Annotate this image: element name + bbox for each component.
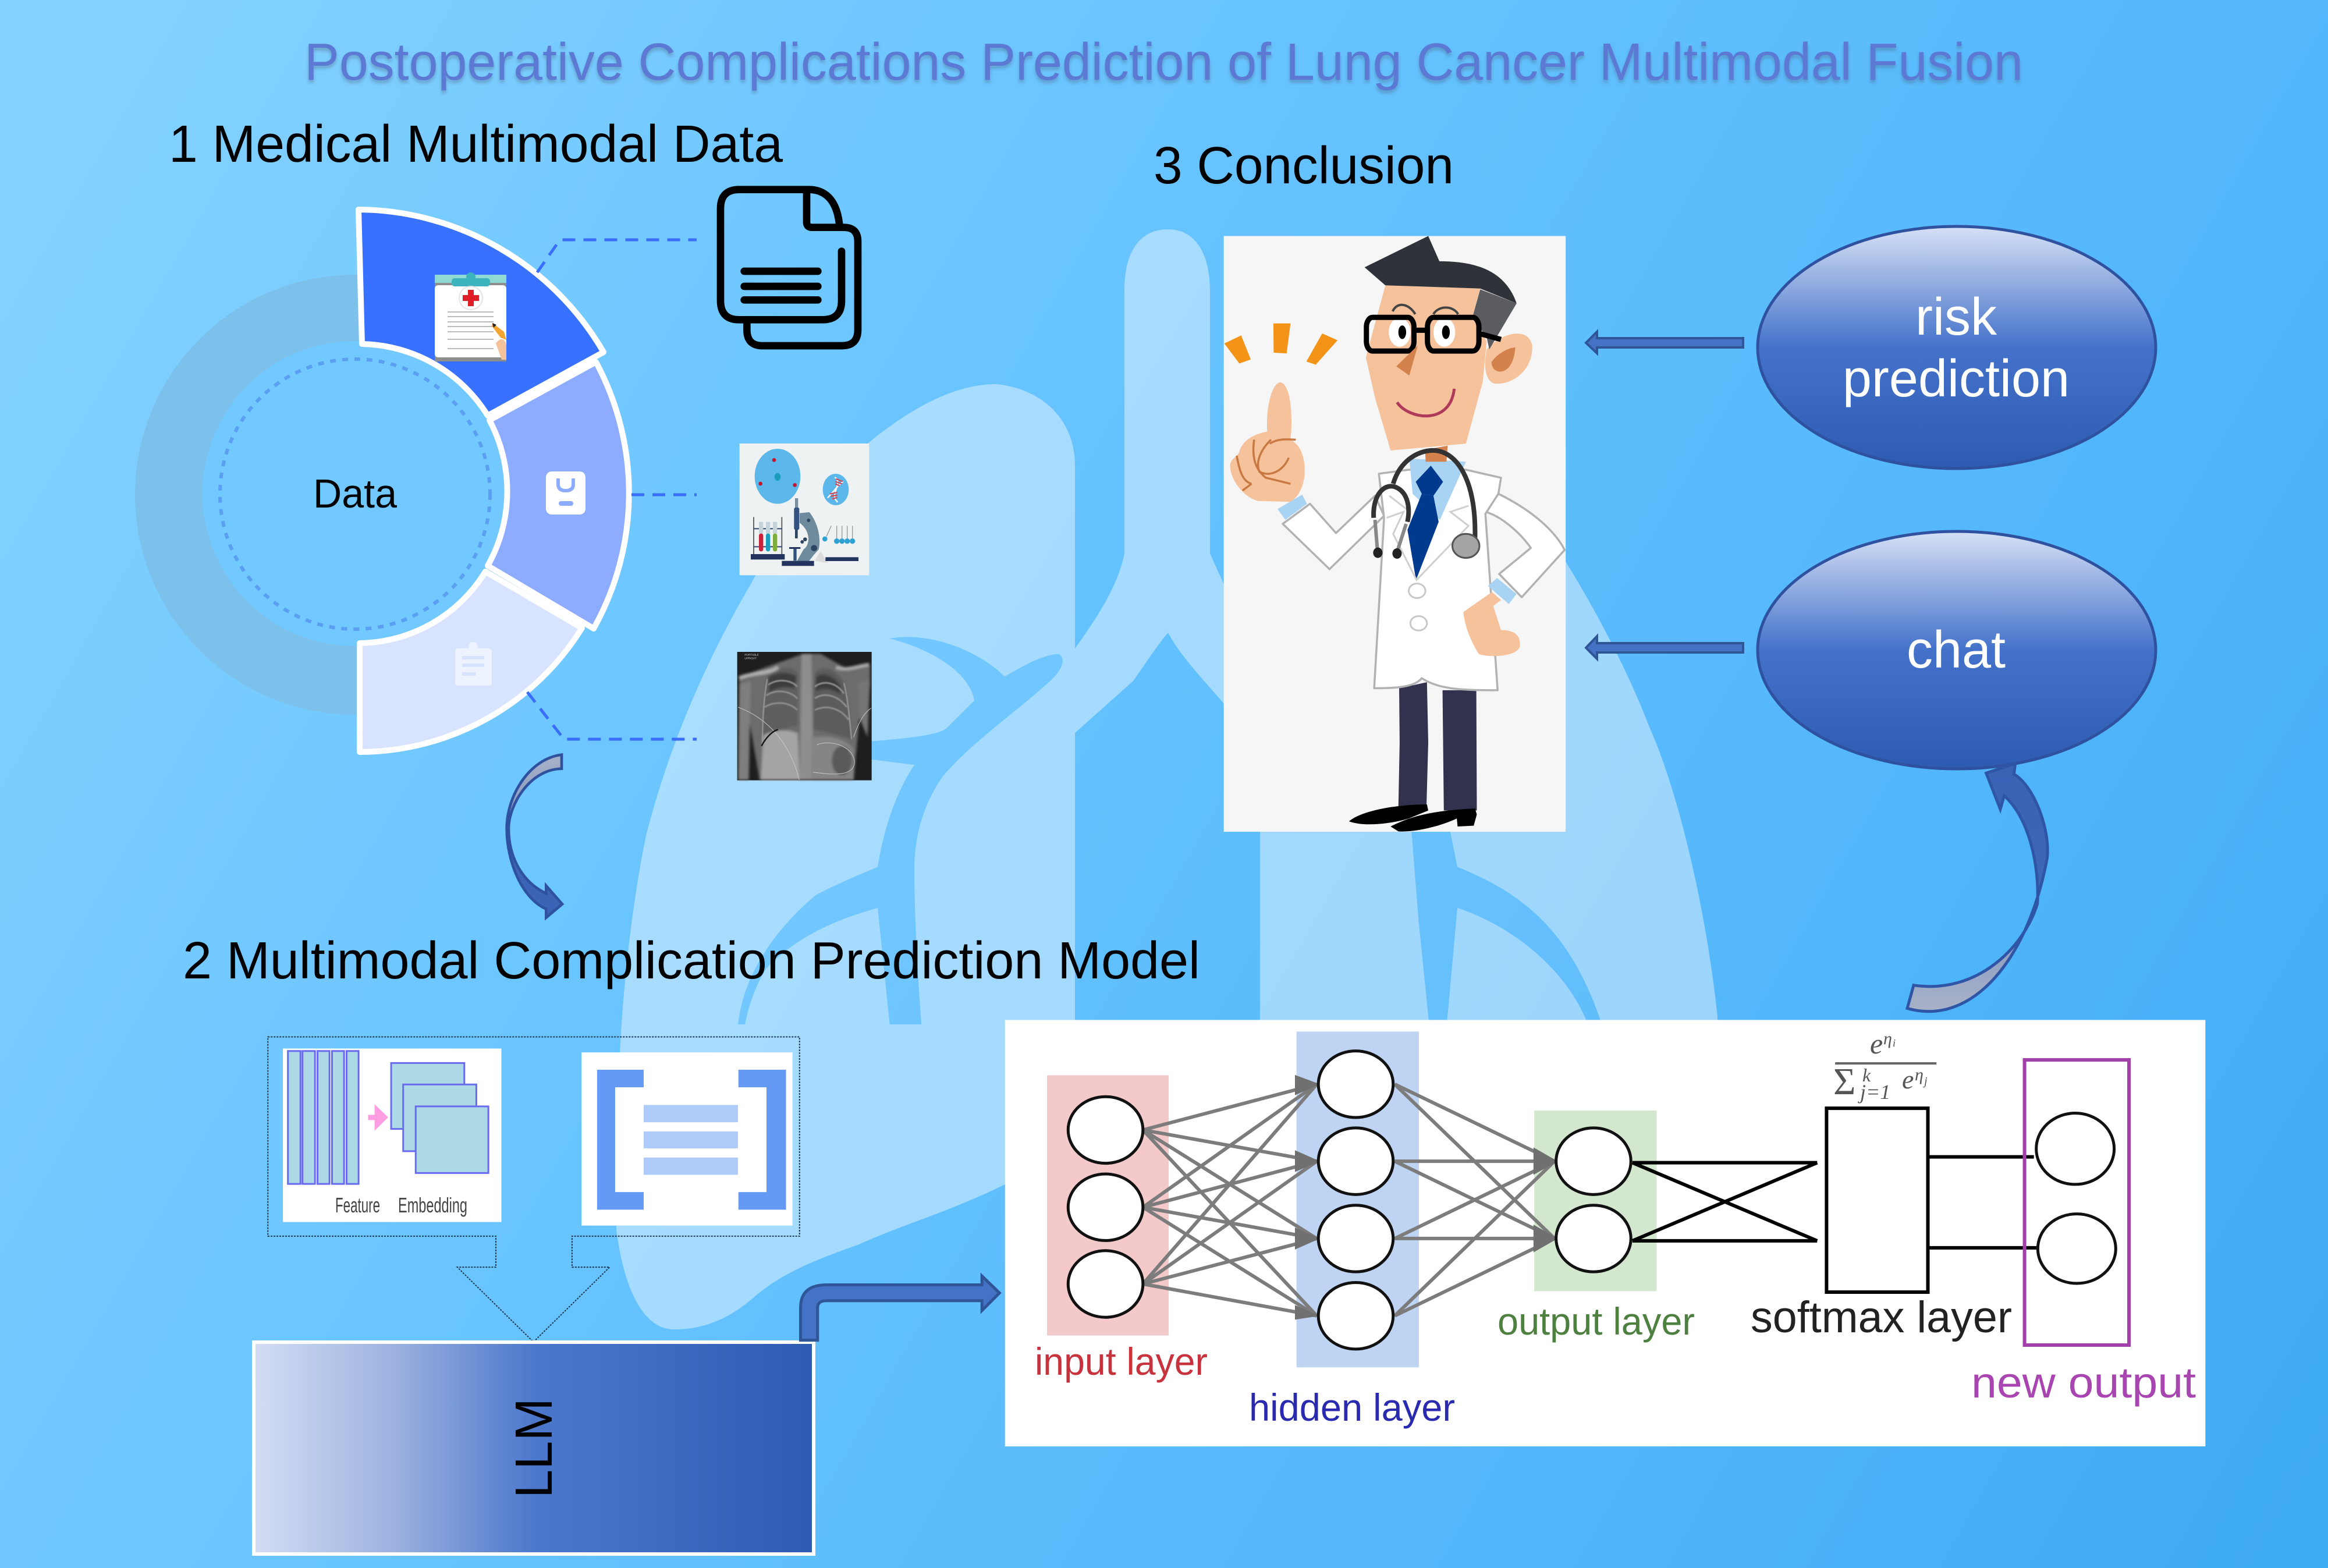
icon: clipboard [455, 642, 492, 686]
feature embedding image [283, 1049, 501, 1222]
icon: lab card [546, 471, 585, 515]
arrow: LLM to network [801, 1276, 999, 1340]
hidden layer band [1297, 1031, 1419, 1367]
softmax box [1826, 1108, 1928, 1292]
panel: neural network [1005, 1020, 2205, 1446]
doctor hands [1230, 382, 1520, 656]
grey ring [135, 275, 575, 715]
doctor legs and shoes [1349, 682, 1477, 832]
title: Postoperative Complications Prediction of Lung Cancer Multimodal Fusion [304, 33, 2023, 91]
ellipse: risk prediction: prediction [1843, 350, 2070, 408]
input layer band [1047, 1075, 1169, 1336]
dashed circle [220, 359, 490, 629]
doctor shirt and tie [1387, 459, 1468, 630]
arrow: network to chat [1907, 764, 2047, 1012]
panel: feature inputs [268, 1037, 800, 1342]
doctor face [1365, 236, 1532, 462]
image: chest x-ray [737, 652, 872, 781]
label: hidden layer: hidden layer [1249, 1386, 1455, 1429]
ellipse: chat [1758, 531, 2156, 769]
image: chest x-ray: UPRIGHT [744, 657, 757, 660]
doctor rays [1225, 324, 1337, 365]
label: softmax layer: softmax layer [1751, 1293, 2012, 1342]
center label: Data [313, 471, 397, 516]
heading: section 1: 1 Medical Multimodal Data [169, 115, 783, 173]
arrow: data to model [507, 755, 562, 918]
arrow: chat to doctor [1586, 636, 1743, 659]
label: formula numerator: e [1870, 1027, 1883, 1060]
formula line [1835, 1062, 1936, 1065]
doctor coat [1283, 470, 1564, 690]
label: formula denominator: η [1915, 1065, 1924, 1084]
doctor stethoscope [1373, 450, 1479, 559]
label: formula numerator: η [1883, 1029, 1892, 1048]
inner circle [203, 341, 508, 646]
label: formula denominator: Σ [1833, 1060, 1855, 1103]
softmax connections [1633, 1157, 2038, 1248]
arrowheads [1295, 1075, 1557, 1319]
leader line: lab [631, 494, 697, 496]
image: laboratory illustration [740, 444, 869, 575]
segment 1 [359, 210, 604, 416]
label: formula denominator: k [1862, 1065, 1871, 1085]
icon: medical record [435, 272, 506, 361]
label: formula denominator: j=1 [1858, 1080, 1890, 1104]
arrow: risk prediction to doctor [1586, 332, 1743, 353]
label: input layer: input layer [1035, 1340, 1208, 1383]
label: formula denominator: e [1902, 1065, 1914, 1094]
heading: section 3: 3 Conclusion [1154, 137, 1454, 195]
panel: data donut [135, 210, 697, 752]
ellipse: risk prediction: risk [1915, 288, 1997, 346]
label: Embedding: Embedding [398, 1193, 467, 1217]
panel: doctor illustration [1224, 236, 1566, 832]
label: output layer: output layer [1497, 1300, 1695, 1343]
segment 2 [488, 362, 629, 629]
leader line: record [537, 240, 697, 272]
ellipse: risk prediction [1758, 226, 2156, 469]
heading: section 2: 2 Multimodal Complication Prediction Model [183, 932, 1200, 990]
image: chest x-ray: PORTABLE [744, 654, 759, 657]
icon: document [721, 190, 858, 346]
box: LLM: LLM [505, 1398, 563, 1498]
label: formula numerator: i [1893, 1037, 1896, 1049]
leader line: imaging [527, 692, 697, 739]
new output box [2025, 1060, 2129, 1345]
label: new output: new output [1971, 1358, 2196, 1407]
label: Feature: Feature [335, 1193, 380, 1217]
output layer band [1534, 1111, 1656, 1291]
network connections [1143, 1084, 1555, 1316]
bracket image [581, 1052, 793, 1226]
callout frame [268, 1037, 800, 1342]
box: LLM [254, 1342, 814, 1554]
ellipse: chat: chat [1907, 621, 2006, 679]
segment 3 [360, 572, 582, 752]
new output nodes [2036, 1113, 2116, 1283]
network nodes [1068, 1051, 1631, 1349]
background lungs silhouette [616, 229, 1717, 1329]
label: formula denominator: j [1922, 1075, 1928, 1088]
